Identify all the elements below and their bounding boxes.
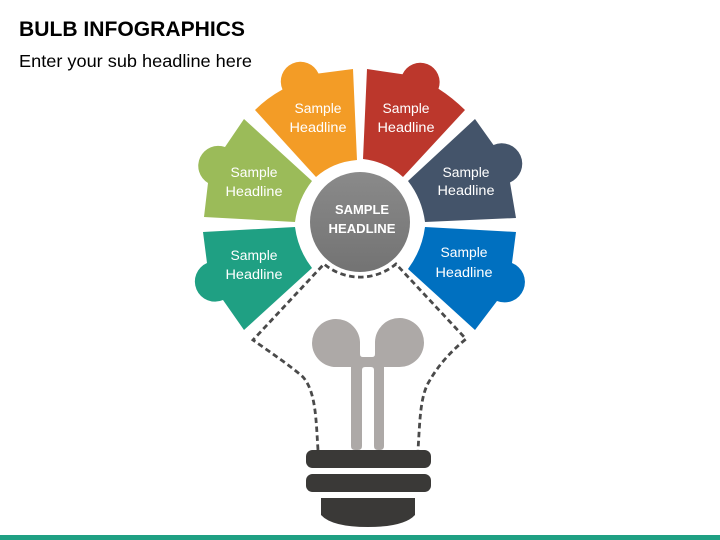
panel: blue petal: Headline <box>436 265 492 280</box>
panel: red petal: Headline <box>378 120 434 135</box>
panel: teal petal <box>195 227 312 330</box>
title: BULB INFOGRAPHICS <box>19 17 245 41</box>
icon: bulb base <box>306 450 431 527</box>
bulb glass dashed outline <box>253 264 466 450</box>
footer bar <box>0 535 720 540</box>
panel: red petal: Sample <box>382 101 430 116</box>
panel: green petal: Headline <box>226 184 282 199</box>
center circle: SAMPLE <box>335 202 389 217</box>
panel: navy petal: Headline <box>438 183 494 198</box>
panel: teal petal: Headline <box>226 267 282 282</box>
icon: bulb filament <box>312 318 424 450</box>
panel: blue petal: Sample <box>440 245 488 260</box>
panel: blue petal <box>408 227 525 330</box>
panel: green petal: Sample <box>230 165 278 180</box>
subtitle: Enter your sub headline here <box>19 51 252 71</box>
panel: navy petal <box>408 119 522 222</box>
panel: teal petal: Sample <box>230 248 278 263</box>
center circle: HEADLINE <box>328 221 396 236</box>
center circle <box>310 172 410 272</box>
panel: navy petal: Sample <box>442 165 490 180</box>
panel: green petal <box>198 119 312 222</box>
panel: orange petal: Headline <box>290 120 346 135</box>
panel: orange petal <box>255 62 357 177</box>
panel: orange petal: Sample <box>294 101 342 116</box>
panel: red petal <box>363 63 465 177</box>
